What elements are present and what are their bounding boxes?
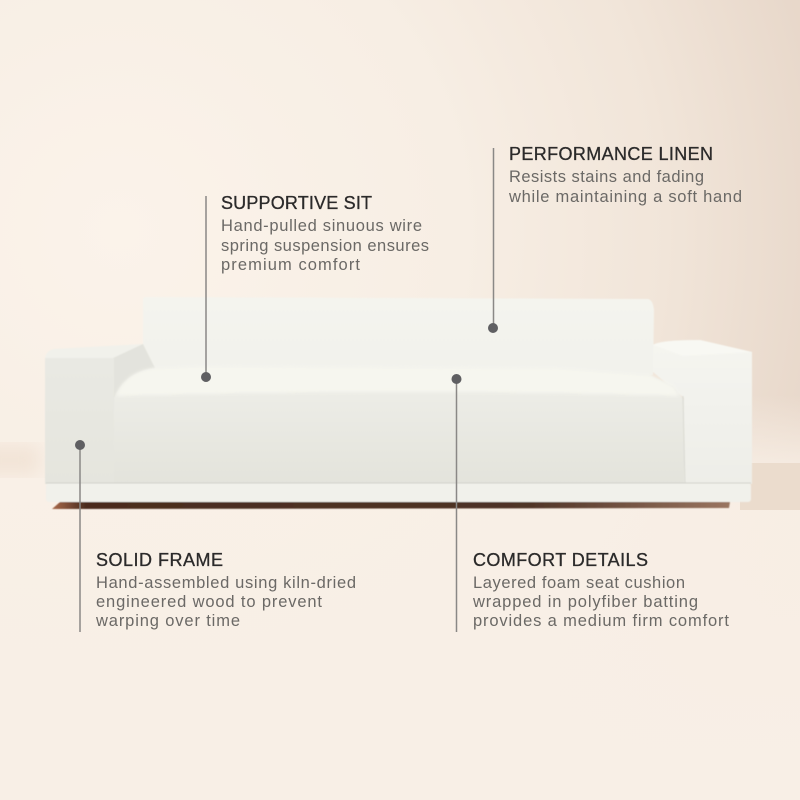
callout: supportive sit	[201, 193, 429, 382]
heading: SOLID FRAME	[96, 550, 223, 570]
leader line and dot	[452, 374, 462, 632]
description	[221, 217, 429, 274]
heading: PERFORMANCE LINEN	[509, 144, 713, 164]
description: Hand-pulled sinuous wire	[221, 217, 422, 235]
description: provides a medium firm comfort	[473, 612, 729, 630]
callout: performance linen	[488, 144, 742, 333]
sofa floor shadow	[52, 502, 730, 509]
sofa right arm	[653, 340, 752, 484]
callout: solid frame	[75, 440, 356, 632]
callout: comfort details	[452, 374, 729, 632]
description: engineered wood to prevent	[96, 593, 322, 611]
heading: SUPPORTIVE SIT	[221, 193, 372, 213]
description: Layered foam seat cushion	[473, 574, 685, 592]
leader line and dot	[488, 148, 498, 333]
leader line and dot	[201, 196, 211, 382]
description: wrapped in polyfiber batting	[472, 593, 698, 611]
heading: COMFORT DETAILS	[473, 550, 648, 570]
sofa seat cushion	[114, 366, 685, 484]
description: Hand-assembled using kiln-dried	[96, 574, 356, 592]
sofa left arm	[45, 344, 155, 484]
description: premium comfort	[221, 256, 360, 274]
sofa base	[46, 483, 751, 502]
description	[472, 574, 729, 630]
description: spring suspension ensures	[221, 237, 429, 255]
sofa backrest	[143, 297, 654, 375]
description: while maintaining a soft hand	[508, 188, 742, 206]
leader line and dot	[75, 440, 85, 632]
description: warping over time	[95, 612, 240, 630]
description: Resists stains and fading	[509, 168, 704, 186]
sofa	[45, 297, 752, 509]
description	[508, 168, 742, 206]
description	[95, 574, 356, 630]
